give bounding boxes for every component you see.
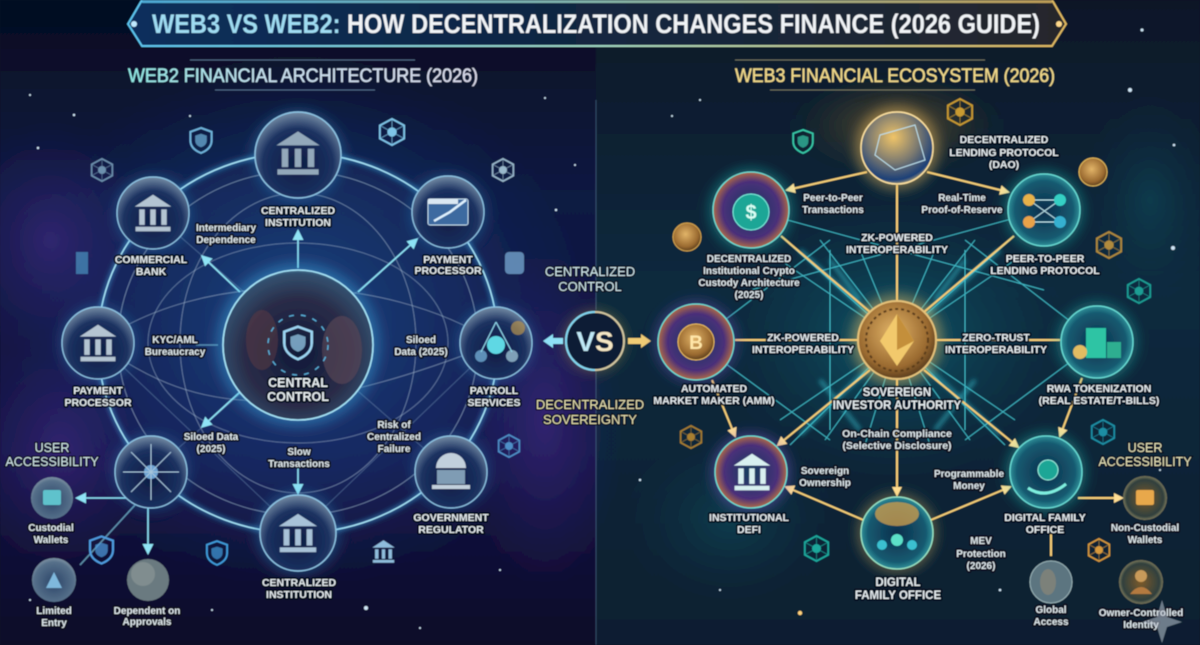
node: payment processor left xyxy=(59,304,137,409)
label: AUTOMATED xyxy=(681,383,747,395)
label: CENTRALIZED xyxy=(261,205,335,217)
limited entry xyxy=(32,558,76,629)
link label: zero-trust interoperability: ZERO-TRUST xyxy=(962,332,1030,344)
label: PAYROLL xyxy=(470,385,519,397)
link label: KYC/AML bureaucracy: KYC/AML xyxy=(152,335,198,346)
link label: ZK-powered interoperability top: INTEROPERABILITY xyxy=(846,244,948,256)
dependent on approvals: Dependent on xyxy=(114,606,180,617)
node: government regulator xyxy=(412,433,490,536)
link label: siloed data left: Siloed Data xyxy=(184,432,239,443)
label: central control: CENTRAL xyxy=(268,376,328,390)
link label: peer-to-peer transactions: Peer-to-Peer xyxy=(803,193,863,204)
small icons: Web3 xyxy=(673,99,1150,561)
node: peer-to-peer lending protocol xyxy=(990,170,1100,277)
central comparison xyxy=(536,264,651,427)
node: commercial bank xyxy=(114,174,192,278)
gold links xyxy=(712,172,1122,556)
user accessibility block xyxy=(1030,441,1192,631)
label: COMMERCIAL xyxy=(115,254,188,266)
custodial wallets xyxy=(28,477,74,546)
label: (2025) xyxy=(735,290,763,301)
node: automated market maker: B xyxy=(689,333,703,354)
node: digital family office right xyxy=(1004,432,1086,536)
label: PROCESSOR xyxy=(64,397,132,409)
VS badge: VS xyxy=(576,326,614,357)
node: centralized institution bottom xyxy=(256,491,340,601)
link label: ZK-powered interoperability top: ZK-POWERED xyxy=(861,232,933,244)
label: (REAL ESTATE/T-BILLS) xyxy=(1039,395,1159,407)
arrows from central control xyxy=(78,232,416,565)
label: DEFI xyxy=(737,524,761,536)
link label: intermediary dependence: Dependence xyxy=(196,235,256,246)
link label: real-time proof-of-reserve: Real-Time xyxy=(938,193,986,204)
global access xyxy=(1030,561,1072,628)
node: institutional custody xyxy=(698,168,800,301)
VS badge xyxy=(563,309,627,373)
link label: slow transactions: Slow xyxy=(287,447,311,458)
label: FAMILY OFFICE xyxy=(855,590,941,602)
link label: on-chain compliance: (Selective Disclosure) xyxy=(842,440,952,452)
teal mesh glow xyxy=(800,250,1000,435)
node: institutional custody: $ xyxy=(745,202,757,224)
non-custodial wallets: Non-Custodial xyxy=(1111,523,1179,534)
owner-controlled identity xyxy=(1099,560,1183,631)
link label: risk of centralized failure: Risk of xyxy=(377,420,411,431)
non-custodial wallets xyxy=(1111,476,1179,546)
node: sovereign investor authority xyxy=(833,294,962,412)
label: PEER-TO-PEER xyxy=(1006,253,1085,265)
arrow: to Web3 xyxy=(628,334,651,348)
node: automated market maker xyxy=(653,300,775,407)
link label: ZK-powered interoperability left: ZK-POWERED xyxy=(767,332,839,344)
label: DIGITAL FAMILY xyxy=(1004,512,1086,524)
label: BANK xyxy=(136,266,167,278)
user accessibility block xyxy=(5,441,180,629)
label: REGULATOR xyxy=(418,524,484,536)
teal mesh xyxy=(696,210,1097,445)
dependent on approvals xyxy=(114,559,180,628)
panel: Web3 financial ecosystem xyxy=(653,60,1192,631)
link label: peer-to-peer transactions: Transactions xyxy=(802,205,864,216)
panel: Web2 financial architecture xyxy=(5,60,535,629)
link label: risk of centralized failure: Failure xyxy=(378,444,411,455)
label: PAYMENT xyxy=(73,385,123,397)
label: decentralized sovereignty: SOVEREIGNTY xyxy=(543,412,637,427)
global access: Global xyxy=(1035,605,1067,616)
label: Institutional Crypto xyxy=(703,266,795,277)
link label: programmable money: Programmable xyxy=(934,469,1004,480)
arrow: to Web2 xyxy=(543,334,563,348)
dependent on approvals: Approvals xyxy=(123,617,172,628)
link label: zero-trust interoperability: INTEROPERABILITY xyxy=(945,344,1047,356)
label: DECENTRALIZED xyxy=(960,134,1049,146)
node: payroll services xyxy=(457,304,535,409)
link label: siloed data left: (2025) xyxy=(197,444,225,455)
label: centralized control: CENTRALIZED xyxy=(545,264,635,279)
label: PAYMENT xyxy=(423,254,473,266)
heading: Web3: WEB3 FINANCIAL ECOSYSTEM (2026) xyxy=(735,65,1055,87)
link label: siloed data right: Data (2025) xyxy=(394,347,448,358)
owner-controlled identity: Identity xyxy=(1123,620,1159,631)
link label: siloed data right: Siloed xyxy=(406,335,436,346)
node: digital family office bottom xyxy=(855,493,941,602)
label: DIGITAL xyxy=(875,577,921,589)
watermark sparkle xyxy=(1142,600,1182,643)
heading: user accessibility: ACCESSIBILITY xyxy=(5,455,99,469)
label: (DAO) xyxy=(989,159,1019,171)
small icons: Web2 xyxy=(76,119,524,565)
label: CENTRALIZED xyxy=(262,577,336,589)
title text: WEB3 VS WEB2: HOW DECENTRALIZATION CHANGES FINANCE (2026 GUIDE) xyxy=(152,9,1040,39)
label: INSTITUTION xyxy=(265,217,331,229)
link label: KYC/AML bureaucracy: Bureaucracy xyxy=(145,347,206,358)
link label: risk of centralized failure: Centralized xyxy=(367,432,421,443)
node: RWA tokenization xyxy=(1039,302,1159,407)
link label: sovereign ownership: Ownership xyxy=(799,478,851,489)
label: MARKET MAKER (AMM) xyxy=(653,395,775,407)
label: LENDING PROTOCOL xyxy=(990,265,1100,277)
link label: programmable money: Money xyxy=(953,481,985,492)
node: payment processor top right xyxy=(409,173,487,277)
label: centralized control: CONTROL xyxy=(558,279,622,294)
custodial wallets: Wallets xyxy=(34,535,69,546)
link label: slow transactions: Transactions xyxy=(268,459,330,470)
label: INVESTOR AUTHORITY xyxy=(833,400,962,412)
label: INSTITUTIONAL xyxy=(709,512,790,524)
label: OFFICE xyxy=(1026,524,1064,536)
non-custodial wallets: Wallets xyxy=(1128,535,1163,546)
label: decentralized sovereignty: DECENTRALIZED xyxy=(536,397,644,412)
custodial wallets: Custodial xyxy=(28,523,74,534)
label: GOVERNMENT xyxy=(413,512,489,524)
link label: on-chain compliance: On-Chain Compliance xyxy=(842,428,952,440)
node: central control xyxy=(216,263,380,427)
node: lending protocol DAO top xyxy=(855,106,1059,190)
network rings and links xyxy=(98,153,498,533)
node: institutional DeFi xyxy=(709,432,791,536)
heading: user accessibility: USER xyxy=(35,441,69,455)
label: PROCESSOR xyxy=(414,265,482,277)
label: central control: CONTROL xyxy=(267,390,329,404)
link label: ZK-powered interoperability left: INTEROPERABILITY xyxy=(752,344,854,356)
heading: user accessibility: ACCESSIBILITY xyxy=(1098,455,1192,469)
label: SOVEREIGN xyxy=(863,387,931,399)
link label: intermediary dependence: Intermediary xyxy=(196,223,256,234)
label: DECENTRALIZED xyxy=(707,254,791,265)
limited entry: Entry xyxy=(41,618,67,629)
link label: MEV protection: (2026) xyxy=(967,561,995,572)
heading: Web2: WEB2 FINANCIAL ARCHITECTURE (2026) xyxy=(128,65,478,87)
heading: user accessibility: USER xyxy=(1128,441,1162,455)
label: RWA TOKENIZATION xyxy=(1047,383,1151,395)
global access: Access xyxy=(1033,617,1069,628)
link label: real-time proof-of-reserve: Proof-of-Reserve xyxy=(921,205,1003,216)
node: centralized institution top xyxy=(252,109,344,229)
label: LENDING PROTOCOL xyxy=(949,147,1059,159)
label: INSTITUTION xyxy=(266,589,332,601)
link label: MEV protection: MEV xyxy=(970,536,992,547)
owner-controlled identity: Owner-Controlled xyxy=(1099,608,1183,619)
label: SERVICES xyxy=(468,397,520,409)
link label: MEV protection: Protection xyxy=(956,549,1006,560)
label: Custody Architecture xyxy=(698,278,800,289)
limited entry: Limited xyxy=(36,606,72,617)
node: network hub lower left xyxy=(112,433,190,511)
link label: sovereign ownership: Sovereign xyxy=(801,466,849,477)
title banner xyxy=(128,0,1066,46)
